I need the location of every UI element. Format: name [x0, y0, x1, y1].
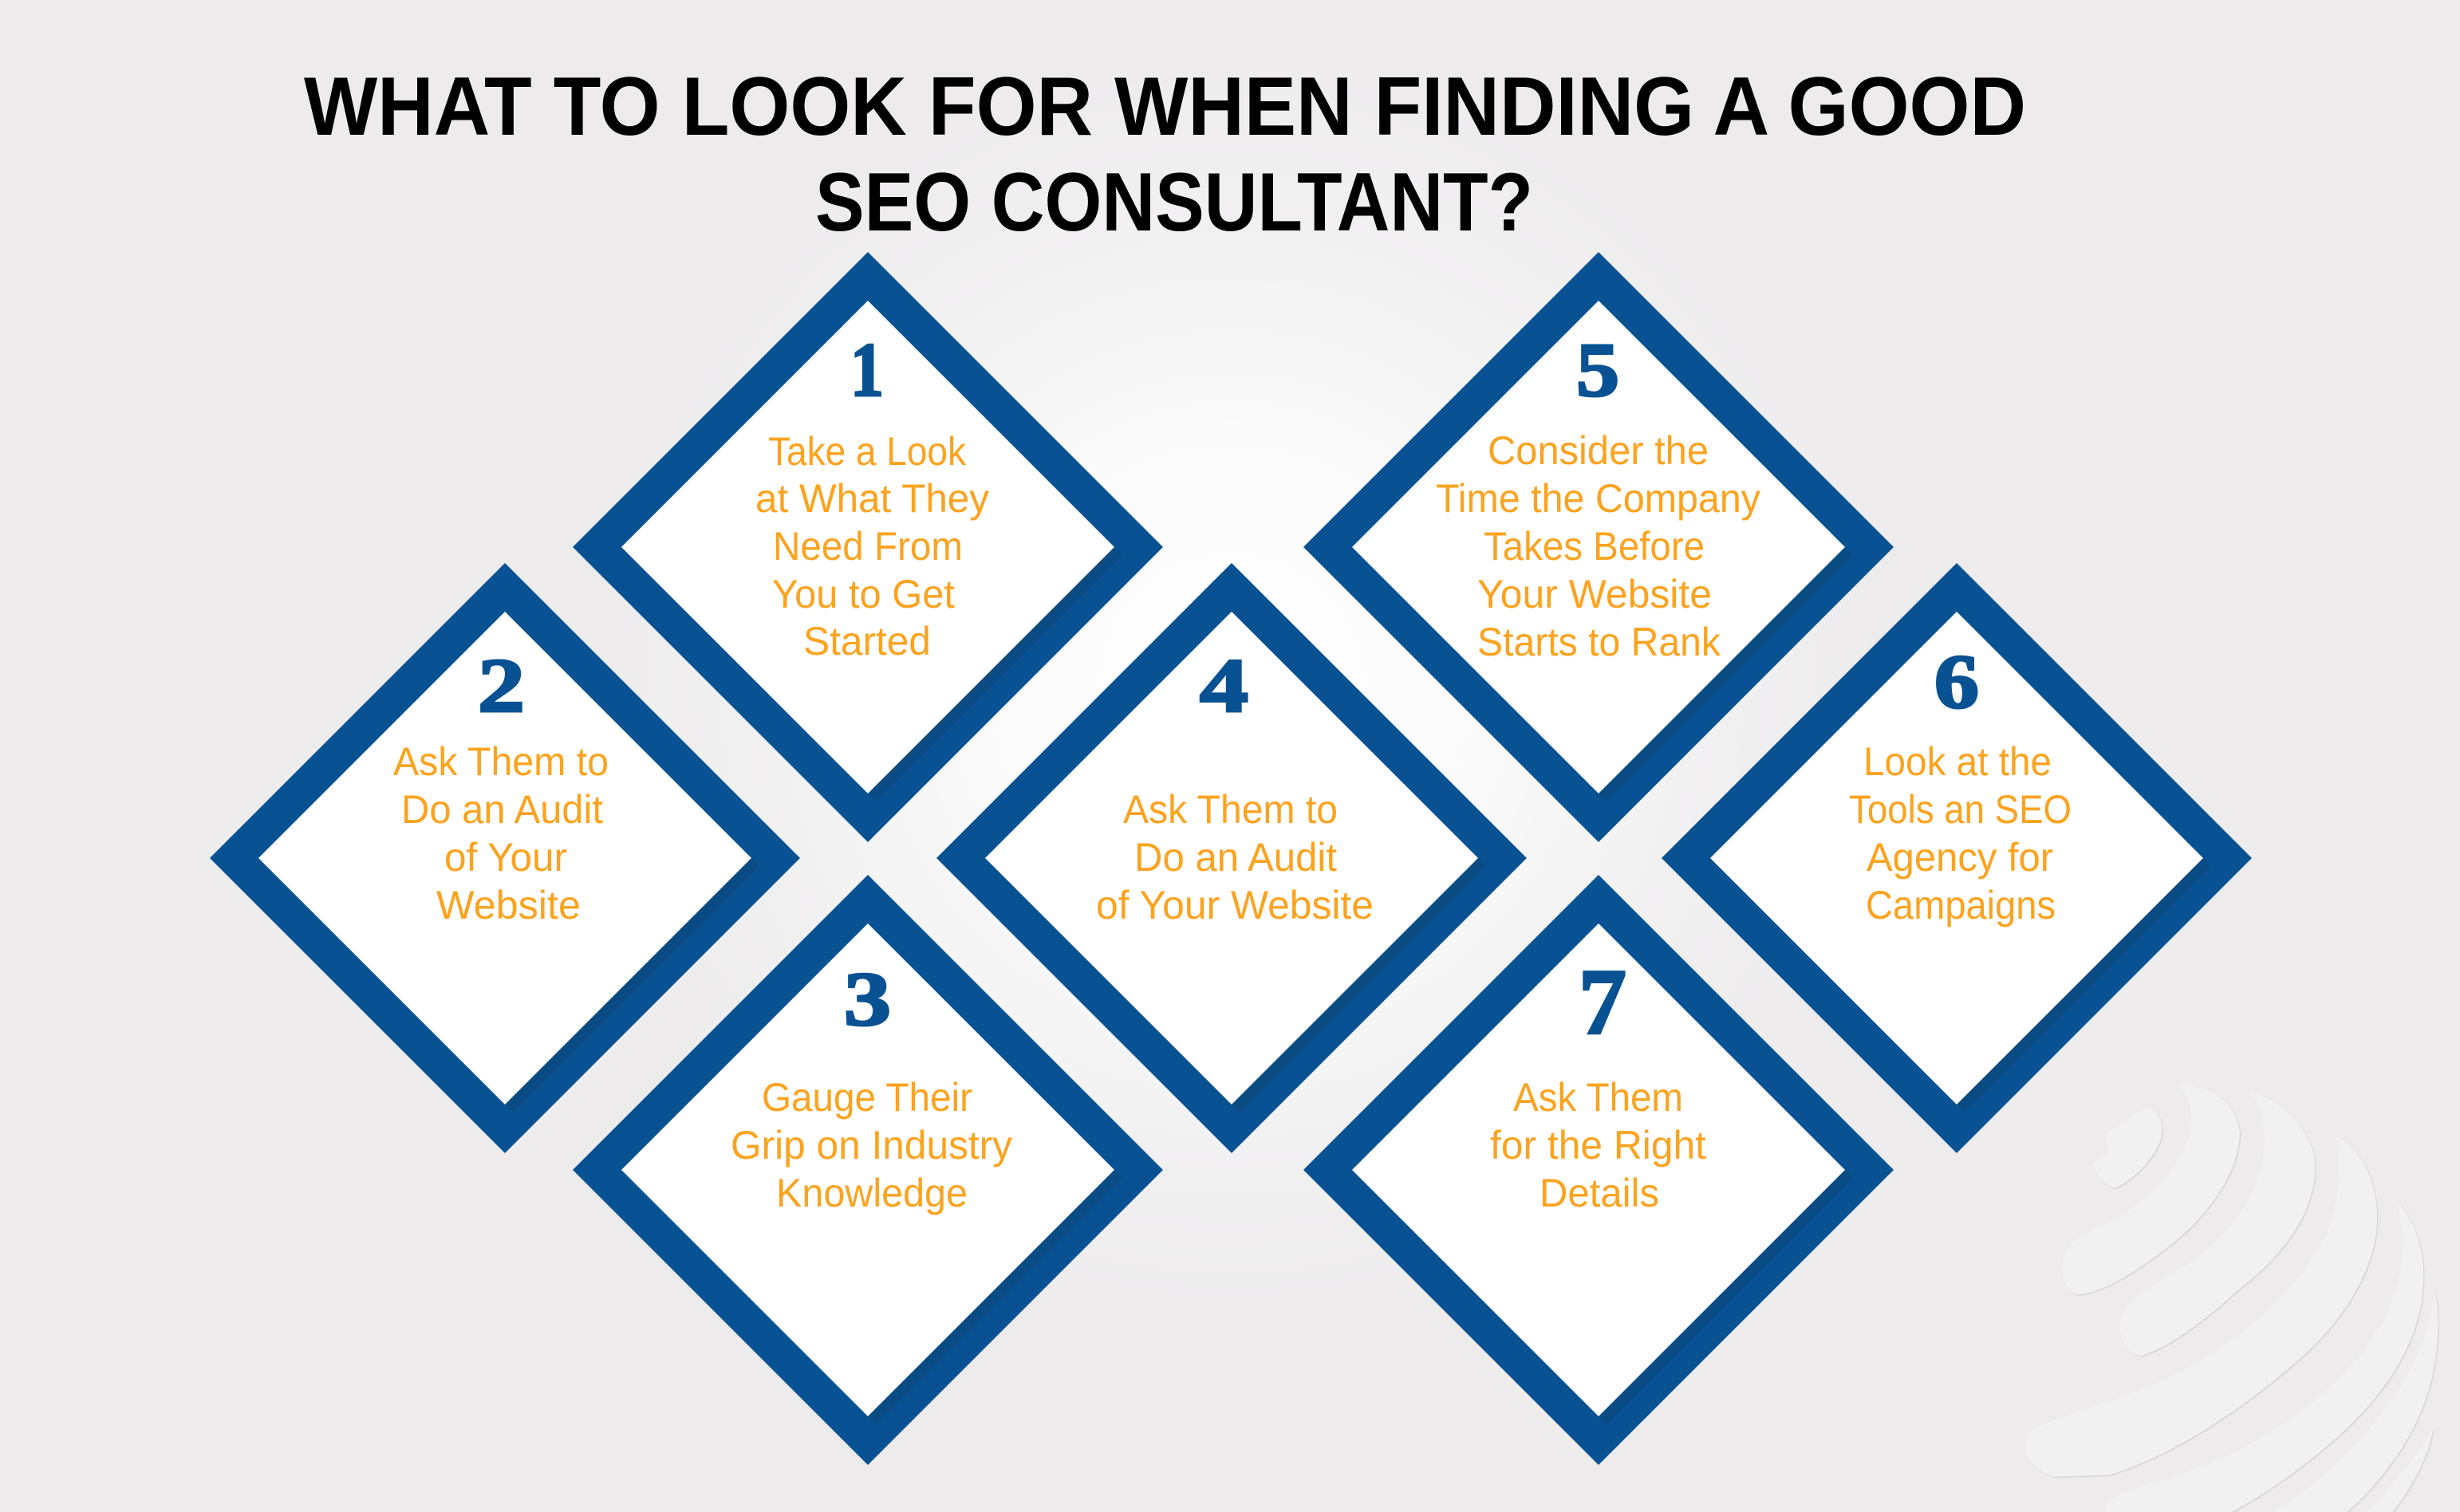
text: item 4: Do an Audit	[1134, 835, 1337, 880]
text: item 1: Need From	[773, 524, 963, 569]
text: item 3: Gauge Their	[762, 1075, 972, 1120]
text: item 1: at What They	[755, 476, 989, 521]
diamond frame 5	[1303, 252, 1894, 842]
text: item 6: Campaigns	[1866, 883, 2056, 927]
panel: item 2	[210, 563, 800, 1153]
text: item 6: Agency for	[1867, 835, 2053, 880]
diamond frame 1	[573, 252, 1163, 842]
text: item 5	[1436, 428, 1760, 664]
text: item 1: You to Get	[772, 572, 955, 616]
text: item 5: Time the Company	[1436, 476, 1760, 521]
number 4: 4	[1200, 643, 1248, 728]
diamond frame 6	[1662, 563, 2252, 1153]
number 1: 1	[850, 327, 884, 412]
diamond frame 7	[1303, 875, 1894, 1465]
text: item 5: Takes Before	[1484, 524, 1705, 569]
text: item 6	[1849, 739, 2072, 927]
title: WHAT TO LOOK FOR WHEN FINDING A GOOD	[304, 61, 2026, 153]
watermark: globe	[2024, 1084, 2438, 1512]
panel: item 7	[1303, 875, 1894, 1465]
text: item 3	[731, 1075, 1012, 1215]
text: item 7: for the Right	[1490, 1123, 1706, 1167]
text: item 3: Grip on Industry	[731, 1123, 1012, 1167]
panel: item 1	[573, 252, 1163, 842]
text: item 5: Starts to Rank	[1477, 620, 1721, 664]
text: item 4: of Your Website	[1096, 883, 1374, 927]
panel: item 4	[936, 563, 1527, 1153]
text: item 7: Ask Them	[1513, 1075, 1683, 1120]
diamond frame 4	[936, 563, 1527, 1153]
text: item 2: Do an Audit	[401, 787, 603, 832]
title: SEO CONSULTANT?	[815, 156, 1533, 249]
number 7: 7	[1579, 950, 1626, 1054]
number 6: 6	[1934, 639, 1979, 724]
text: item 2: Ask Them to	[393, 739, 609, 784]
text: item 4	[1096, 787, 1374, 927]
text: item 6: Look at the	[1863, 739, 2052, 784]
text: item 3: Knowledge	[776, 1171, 968, 1215]
number 3: 3	[844, 956, 891, 1041]
panel: item 6	[1662, 563, 2252, 1153]
panel: item 5	[1303, 252, 1894, 842]
text: item 2: of Your	[444, 835, 567, 880]
text: item 2	[393, 739, 609, 927]
text: item 7	[1490, 1075, 1706, 1215]
text: item 2: Website	[436, 883, 581, 927]
text: item 6: Tools an SEO	[1849, 787, 2072, 832]
diamond frame 3	[573, 875, 1163, 1465]
number 5: 5	[1576, 327, 1619, 412]
panel: item 3	[573, 875, 1163, 1465]
number 2: 2	[478, 643, 525, 728]
text: item 1	[755, 429, 989, 663]
text: item 5: Your Website	[1477, 572, 1712, 616]
text: item 1: Take a Look	[768, 429, 967, 474]
text: item 7: Details	[1539, 1171, 1659, 1215]
text: item 5: Consider the	[1488, 428, 1709, 473]
text: item 1: Started	[803, 619, 931, 663]
diamond frame 2	[210, 563, 800, 1153]
text: item 4: Ask Them to	[1123, 787, 1338, 832]
title	[304, 61, 2026, 249]
